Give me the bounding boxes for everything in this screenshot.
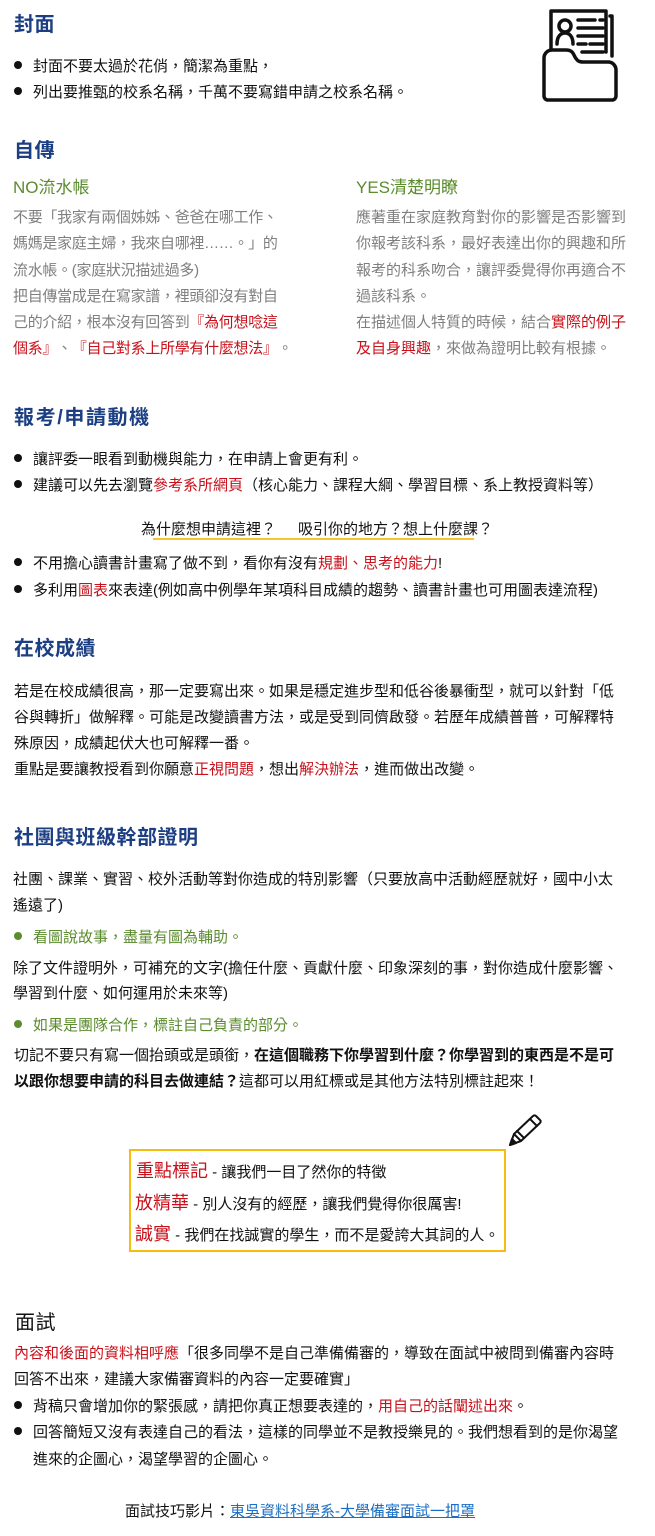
text: no chronicle description: 流水帳。(家庭狀況描述過多) (13, 262, 199, 279)
bullet: see motivation and ability: 讓評委一眼看到動機與能力，在申請上會更有利。 (33, 451, 363, 468)
panel: cover section (14, 9, 618, 102)
text: interview video link: 面試技巧影片：東吳資料科學系-大學備審面試一把罩 (125, 1503, 475, 1520)
text: grades explanation: 谷與轉折」做解釋。可能是改變讀書方法，或是受到同儕啟發。若歷年成績普普，可解釋特 (14, 709, 614, 726)
text: grades explanation: 重點是要讓教授看到你願意正視問題，想出解決辦法，進而做出改變。 (14, 761, 479, 778)
panel: motivation section (14, 406, 603, 599)
text: yes clear description: 應著重在家庭教育對你的影響是否影響到 (356, 209, 626, 226)
callout: key questions with underline: 為什麼想申請這裡？ (141, 521, 276, 538)
text: activities intro (13, 871, 613, 914)
text: yes clear description: 報考的科系吻合，讓評委覺得你再適合不 (356, 262, 626, 279)
callout line: highlight: 重點標記 - 讓我們一目了然你的特徵 (136, 1161, 386, 1181)
panel: interview section (14, 1312, 618, 1520)
text: yes clear description: 過該科系。 (356, 288, 431, 305)
text: interview consistency: 內容和後面的資料相呼應「很多同學不是自己準備備審的，導致在面試中被問到備審內容時 (14, 1345, 614, 1362)
text: no chronicle description: 媽媽是家庭主婦，我來自哪裡……。」的 (13, 235, 278, 252)
bullet: use charts: 多利用圖表來表達(例如高中例學年某項科目成績的趨勢、讀書計畫也可用圖表達流程) (33, 582, 598, 599)
callout: key questions with underline (141, 521, 493, 540)
text: no chronicle description: 個系』、『自己對系上所學有什麼想法』。 (13, 340, 292, 357)
text: what you learned: 切記不要只有寫一個抬頭或是頭銜，在這個職務下你學習到什麼？你學習到的東西是不是可 (14, 1047, 614, 1064)
text: what you learned: 以跟你想要申請的科目去做連結？這都可以用紅標或是其他方法特別標註起來！ (14, 1073, 539, 1090)
text: grades explanation: 若是在校成績很高，那一定要寫出來。如果是穩定進步型和低谷後暴衝型，就可以針對「低 (14, 683, 614, 700)
text: supplementary writing (13, 960, 618, 1002)
icon: folder with resume (542, 9, 618, 102)
heading: interview: 面試 (15, 1312, 56, 1334)
subheading: yes clear: YES清楚明瞭 (356, 178, 458, 197)
bullet: study plan: 不用擔心讀書計畫寫了做不到，看你有沒有規劃、思考的能力! (33, 555, 442, 572)
subheading: no chronicle: NO流水帳 (13, 178, 90, 197)
panel: yes clear column (356, 178, 626, 357)
heading: cover: 封面 (14, 14, 55, 36)
text: yes clear description: 你報考該科系，最好表達出你的興趣和所 (356, 235, 626, 252)
heading: motivation: 報考/申請動機 (14, 407, 151, 429)
text: yes clear description (356, 209, 626, 357)
callout line: honesty: 誠實 - 我們在找誠實的學生，而不是愛誇大其詞的人。 (135, 1224, 499, 1244)
icon: pencil (509, 1114, 542, 1146)
text: activities intro: 社團、課業、實習、校外活動等對你造成的特別影響（只要放高中活動經歷就好，國中小太 (13, 871, 613, 888)
text: yes clear description: 及自身興趣，來做為證明比較有根據。 (356, 340, 611, 357)
bullet: team work: 如果是團隊合作，標註自己負責的部分。 (33, 1017, 303, 1034)
panel: grades section (14, 638, 614, 778)
bullet: no reciting: 背稿只會增加你的緊張感，請把你真正想要表達的，用自己的話闡述出來。 (33, 1398, 528, 1415)
text: no chronicle description (13, 209, 292, 357)
text: interview consistency (14, 1345, 614, 1388)
panel: clubs and cadre section (13, 826, 618, 1090)
text: what you learned (14, 1047, 614, 1090)
panel: no chronicle column (13, 178, 292, 357)
text: grades explanation (14, 683, 614, 778)
text: yes clear description: 在描述個人特質的時候，結合實際的例子 (356, 314, 626, 331)
text: no chronicle description: 不要「我家有兩個姊姊、爸爸在哪工作、 (13, 209, 278, 226)
text: supplementary writing: 學習到什麼、如何運用於未來等) (13, 985, 228, 1002)
callout line: show highlights: 放精華 - 別人沒有的經歷，讓我們覺得你很厲害! (135, 1193, 462, 1213)
heading: autobiography: 自傳 (14, 140, 55, 162)
callout: key questions with underline: 吸引你的地方？想上什麼課？ (298, 521, 493, 538)
bullet: tell stories with images: 看圖說故事，盡量有圖為輔助。 (33, 929, 243, 946)
text: bullet continuation: 進來的企圖心，渴望學習的企圖心。 (33, 1451, 273, 1468)
text: supplementary writing: 除了文件證明外，可補充的文字(擔任什麼、貢獻什麼、印象深刻的事，對你造成什麼影響、 (13, 960, 618, 977)
text: no chronicle description: 己的介紹，根本沒有回答到『為何想唸這 (13, 314, 278, 331)
heading: grades: 在校成績 (14, 638, 96, 660)
bullet: browse department website: 建議可以先去瀏覽參考系所網頁（核心能力、課程大綱、學習目標、系上教授資料等） (33, 477, 603, 494)
text: activities intro: 遙遠了) (13, 897, 63, 914)
panel: autobiography section (13, 140, 626, 357)
text: grades explanation: 殊原因，成績起伏大也可解釋一番。 (14, 735, 254, 752)
bullet: show ambition: 回答簡短又沒有表達自己的看法，這樣的同學並不是教授樂見的。我們想看到的是你渴望 (33, 1424, 618, 1441)
bullet: school and department name: 列出要推甄的校系名稱，千萬不要寫錯申請之校系名稱。 (33, 84, 408, 101)
callout: key highlights box (129, 1149, 506, 1252)
text: interview consistency: 回答不出來，建議大家備審資料的內容一定要確實」 (14, 1371, 359, 1388)
heading: clubs and cadre proof: 社團與班級幹部證明 (14, 827, 198, 849)
text: no chronicle description: 把自傳當成是在寫家譜，裡頭卻沒有對自 (13, 288, 278, 305)
bullet: simple cover: 封面不要太過於花俏，簡潔為重點， (33, 58, 273, 75)
